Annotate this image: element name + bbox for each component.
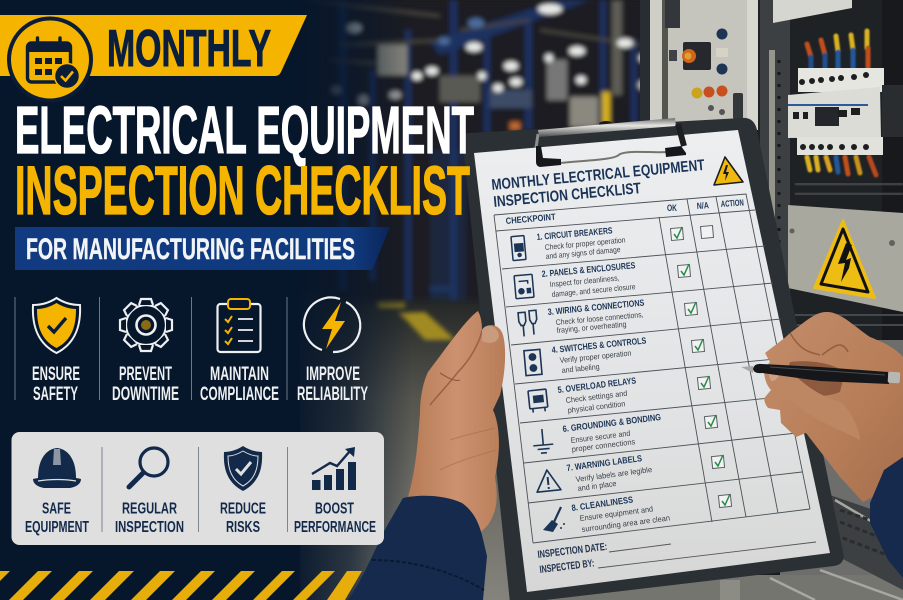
row 2: panels and enclosures [514, 260, 636, 299]
row 7: warning labels [535, 453, 653, 493]
right hand writing [764, 312, 903, 502]
outcome: reduce risks: RISKS [226, 519, 260, 536]
benefit: maintain compliance [200, 299, 279, 405]
checklist table grid [494, 194, 810, 543]
row 5: overload relays: physical condition [567, 399, 626, 415]
background: electrical cabinets [650, 0, 903, 340]
monthly banner [0, 15, 307, 100]
row 1: circuit breakers: and any signs of damage [545, 245, 621, 261]
table headers [505, 197, 744, 226]
benefit: maintain compliance: COMPLIANCE [200, 384, 279, 405]
subtitle ribbon: FOR MANUFACTURING FACILITIES [26, 233, 355, 266]
clipboard [463, 118, 844, 600]
outcome: safe equipment [25, 448, 89, 536]
table headers: OK [667, 203, 677, 213]
row 3: wiring and connections: Check for loose connections, [555, 310, 644, 327]
benefit: maintain compliance: MAINTAIN [210, 364, 269, 385]
open cabinet interior [758, 0, 903, 340]
row 5: overload relays: Check settings and [565, 389, 628, 405]
checkboxes [670, 225, 732, 508]
clipboard board [463, 118, 844, 600]
row 2: panels and enclosures: Inspect for cleanliness, [549, 273, 620, 289]
inspection date and signature lines: INSPECTION DATE: [537, 541, 608, 561]
row 4: switches and controls: 4. SWITCHES & CONTROLS [551, 335, 647, 355]
benefit: ensure safety: SAFETY [33, 384, 78, 405]
row 1: circuit breakers: Check for proper operation [544, 235, 626, 252]
row 2: panels and enclosures: damage, and secure closure [551, 282, 636, 299]
table headers: ACTION [720, 197, 744, 209]
row 4: switches and controls: Verify proper operation [559, 349, 632, 365]
outcome: boost performance: PERFORMANCE [294, 519, 376, 536]
monthly banner: MONTHLY [107, 20, 271, 78]
background: lower right floor and machinery [540, 340, 903, 600]
row 6: grounding and bonding [532, 412, 662, 454]
row 7: warning labels: 7. WARNING LABELS [566, 453, 643, 473]
row 2: panels and enclosures: 2. PANELS & ENCLOSURES [541, 260, 636, 279]
row 8: cleanliness [543, 494, 670, 534]
icon: high voltage warning triangle [814, 220, 875, 298]
benefits row [15, 297, 368, 405]
row 3: wiring and connections: 3. WIRING & CONNECTIONS [547, 298, 645, 317]
row 8: cleanliness: Ensure equipment and [579, 504, 654, 523]
right sleeve [870, 457, 903, 578]
row 8: cleanliness: 8. CLEANLINESS [571, 494, 634, 513]
warning plate [788, 205, 903, 312]
row 6: grounding and bonding: proper connections [571, 437, 636, 454]
row 3: wiring and connections [518, 298, 645, 337]
icon: warning triangle on sheet [714, 157, 743, 185]
row 3: wiring and connections: fraying, or overheating [556, 320, 627, 335]
row 1: circuit breakers: 1. CIRCUIT BREAKERS [536, 225, 613, 242]
outcome: safe equipment: SAFE [42, 500, 71, 518]
benefit: prevent downtime: PREVENT [119, 364, 172, 385]
breaker block [788, 68, 903, 155]
outcome: regular inspection: INSPECTION [115, 519, 184, 536]
outcome: regular inspection [115, 448, 184, 536]
icon: calendar with check badge [9, 18, 91, 100]
row 7: warning labels: Verify labels are legible [575, 465, 653, 484]
left hand holding clipboard [408, 311, 505, 533]
row 6: grounding and bonding: Ensure secure and [570, 429, 631, 445]
pen [741, 364, 900, 384]
title: ELECTRICAL EQUIPMENT [15, 93, 474, 168]
sheet title: INSPECTION CHECKLIST [493, 180, 642, 211]
benefit: prevent downtime: DOWNTIME [112, 384, 179, 405]
wires [807, 31, 876, 175]
sheet title [491, 157, 706, 211]
left sleeve [348, 496, 487, 600]
benefit: improve reliability: IMPROVE [306, 364, 360, 385]
inspection date and signature lines: INSPECTED BY: [539, 557, 595, 576]
light outcomes panel [12, 432, 384, 545]
sheet title: MONTHLY ELECTRICAL EQUIPMENT [491, 157, 706, 194]
row 4: switches and controls [524, 335, 647, 376]
inspection date and signature lines [537, 541, 816, 576]
row 8: cleanliness: surrounding area are clean [581, 513, 670, 534]
outcome: reduce risks [220, 446, 266, 536]
control panel door [650, 0, 760, 130]
title: INSPECTION CHECKLIST [15, 152, 470, 229]
benefit: prevent downtime [112, 299, 179, 405]
paper sheet [474, 130, 830, 592]
benefit: improve reliability: RELIABILITY [297, 384, 368, 405]
row 4: switches and controls: and labeling [561, 362, 600, 375]
row 1: circuit breakers [511, 225, 626, 261]
hazard stripes [0, 571, 362, 600]
outcome: regular inspection: REGULAR [122, 500, 177, 518]
row 7: warning labels: and in place [577, 479, 617, 493]
outcome: safe equipment: EQUIPMENT [25, 519, 89, 536]
row 6: grounding and bonding: 6. GROUNDING & BONDING [562, 412, 662, 434]
row 5: overload relays: 5. OVERLOAD RELAYS [557, 375, 637, 395]
table headers: CHECKPOINT [505, 212, 556, 226]
table headers: N/A [696, 200, 709, 211]
title [15, 93, 474, 229]
metal clip [536, 118, 686, 167]
benefit: ensure safety: ENSURE [32, 364, 80, 385]
left dark gradient overlay [0, 0, 412, 600]
subtitle ribbon [15, 227, 390, 270]
benefit: ensure safety [32, 298, 80, 405]
outcome: reduce risks: REDUCE [220, 500, 266, 518]
outcome: boost performance: BOOST [315, 500, 354, 518]
benefit: improve reliability [297, 297, 368, 405]
outcome: boost performance [294, 447, 376, 536]
row 5: overload relays [528, 375, 637, 415]
